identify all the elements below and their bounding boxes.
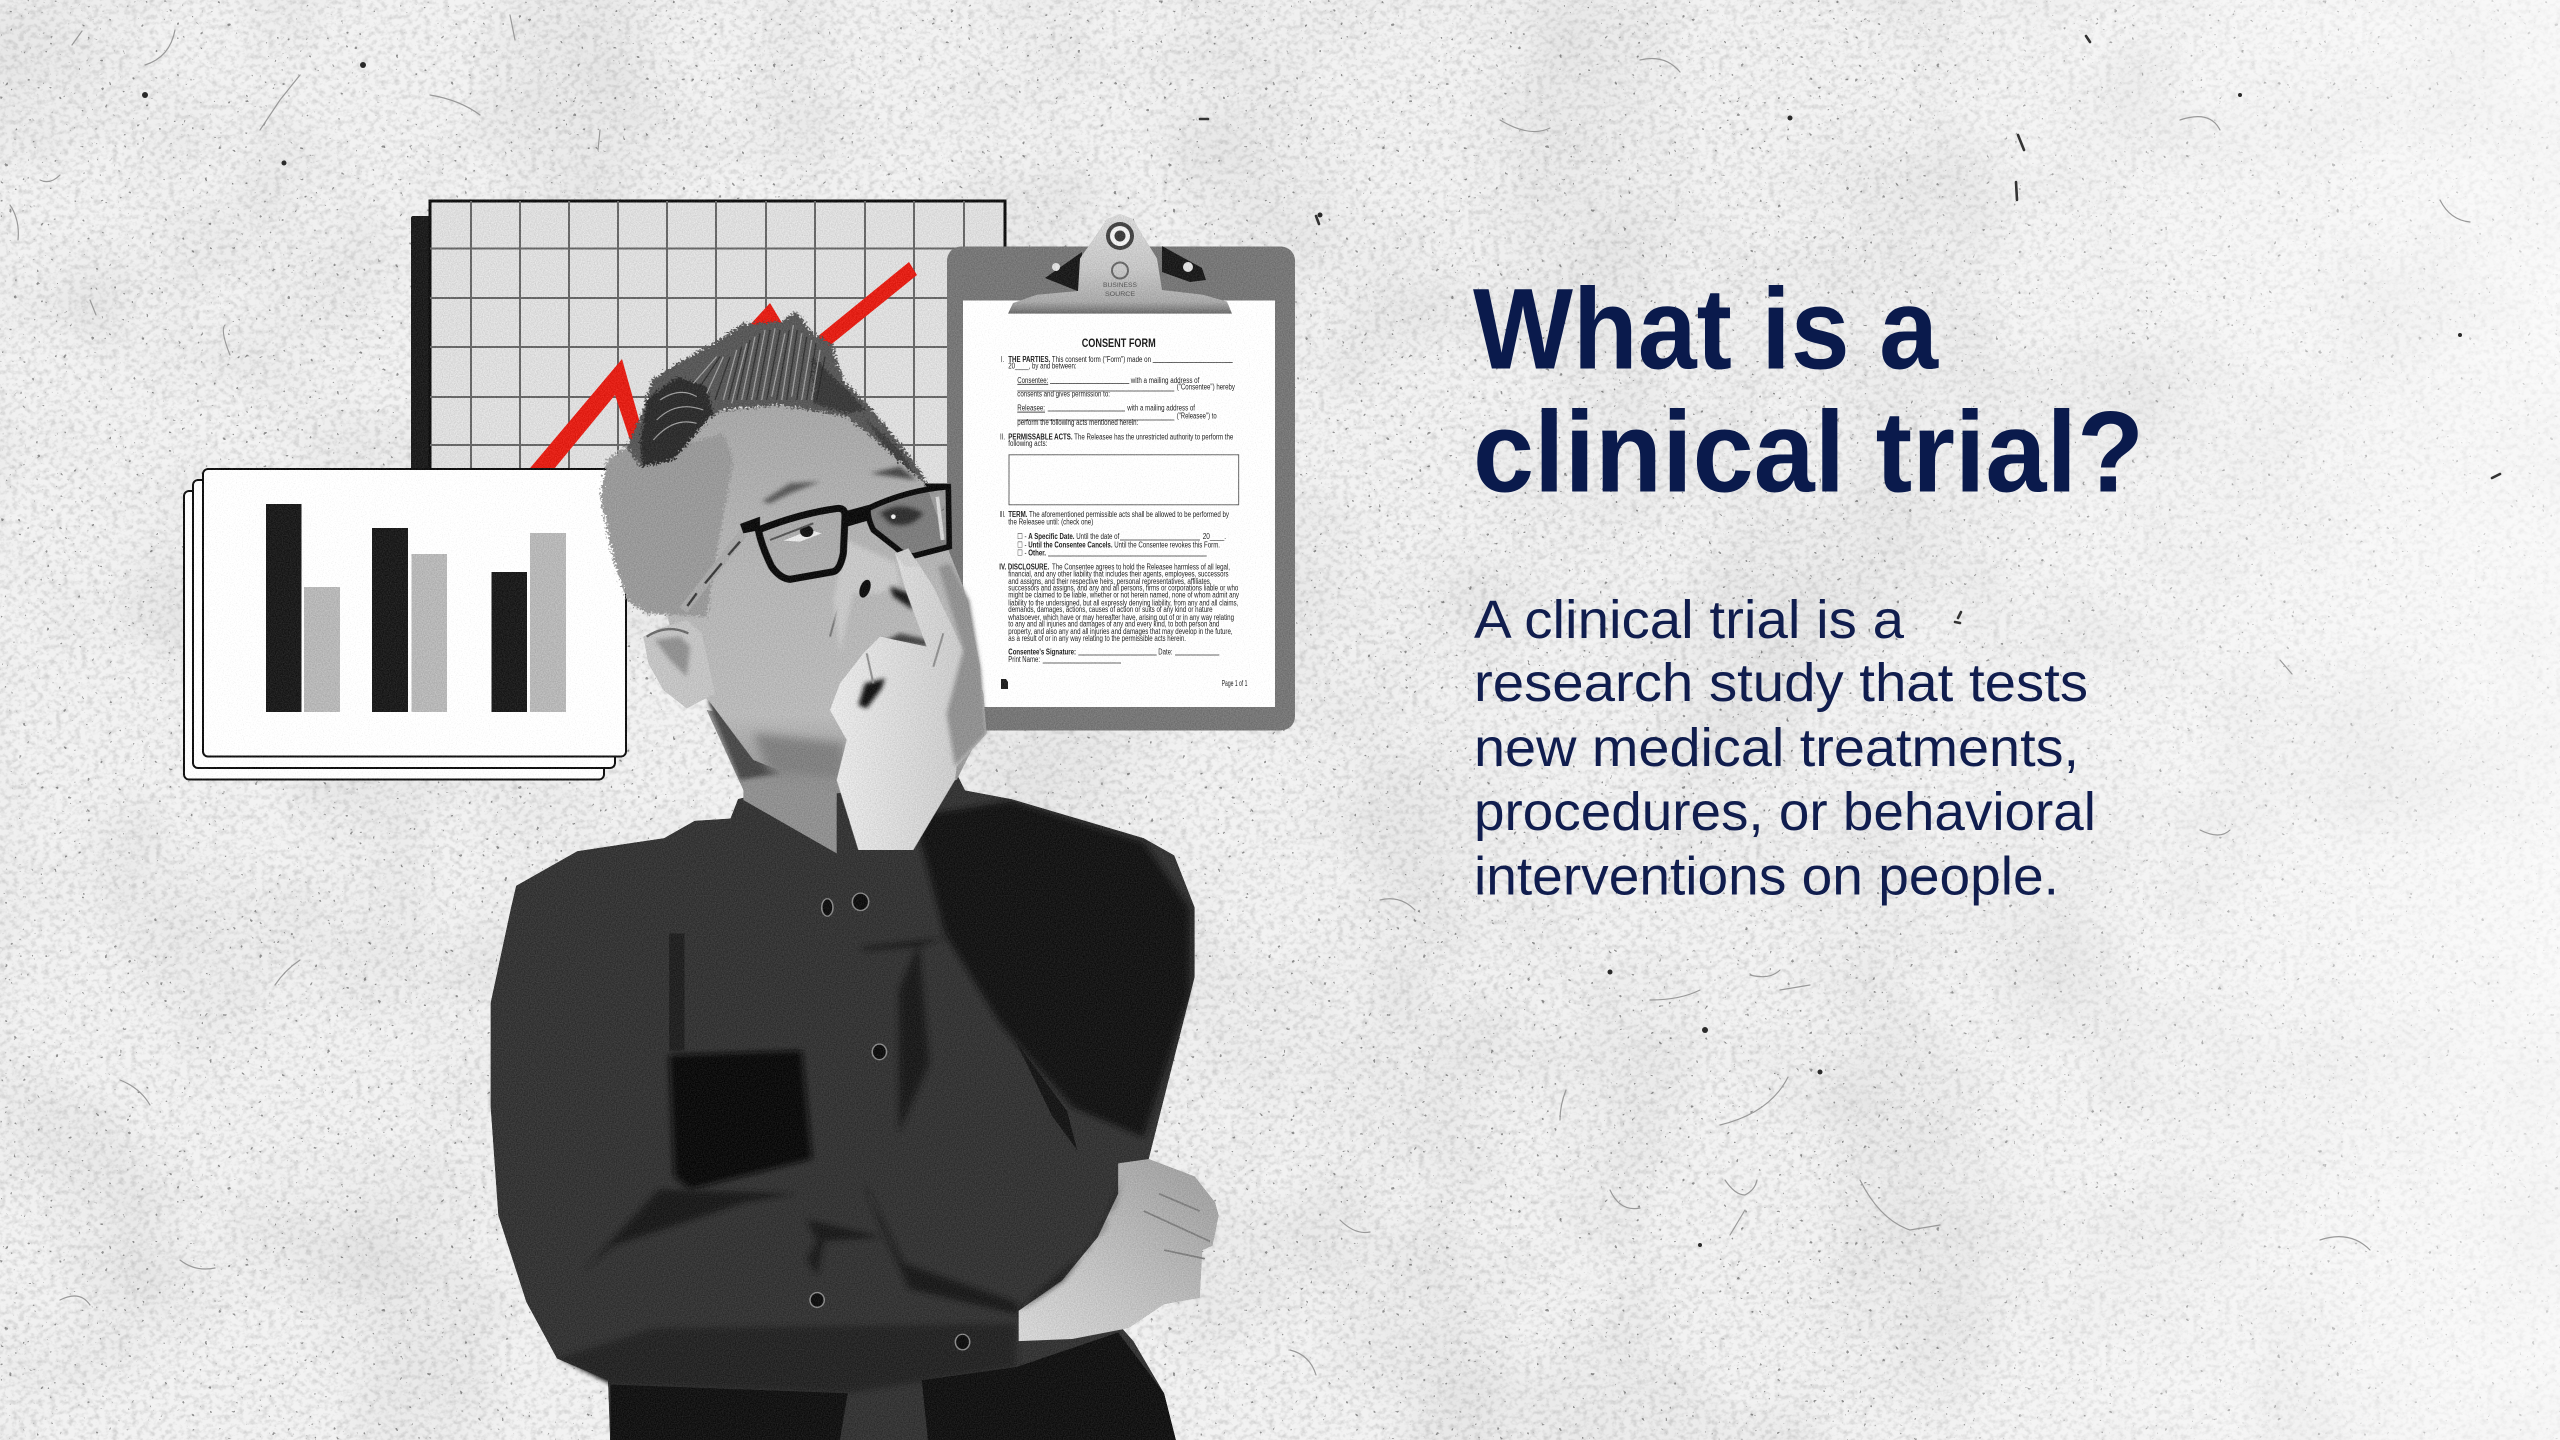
front card	[203, 469, 626, 756]
consent form text: perform the following acts mentioned herein:	[1017, 418, 1138, 427]
title: clinical trial?	[1473, 388, 2144, 516]
consent form text: Print Name:	[1008, 655, 1040, 664]
head group	[600, 312, 987, 853]
title	[1473, 266, 2144, 516]
top hair	[627, 312, 928, 487]
consent form text: successors and assigns, and any and all persons, firms or corporations liable or who	[1008, 584, 1239, 592]
consent form text: liability to the undersigned, but all expressly denying liability, from any and all claims,	[1008, 598, 1238, 607]
clipboard board	[947, 246, 1295, 730]
bar chart cards	[184, 469, 626, 780]
consent form text: 20____.	[1203, 532, 1226, 541]
consent form text: ("Releasee") to	[1177, 411, 1217, 420]
consent form text: ("Consentee") hereby	[1177, 383, 1235, 392]
consent form text: IV. DISCLOSURE.	[999, 562, 1049, 572]
fingertip on glasses	[895, 548, 920, 567]
shirt buttons	[810, 893, 970, 1350]
consent form text: as a result of or in any way relating to the permissible acts herein.	[1008, 634, 1186, 643]
consent form text: the Releasee until: (check one)	[1008, 518, 1094, 527]
consent form text: Page 1 of 1	[1222, 679, 1248, 688]
title: What is a	[1473, 266, 1939, 394]
forearm band	[557, 1324, 1016, 1393]
consent form text: II.	[1000, 432, 1005, 441]
person thinking	[491, 312, 1219, 1440]
consent form text: THE PARTIES. This consent form ("Form") made on	[1008, 355, 1151, 364]
consent form text: ☐ - Until the Consentee Cancels. Until the Consentee revokes this Form.	[1017, 540, 1220, 550]
body paragraph: procedures, or behavioral	[1474, 782, 2096, 842]
consent form text: ☐ - Other.	[1017, 548, 1046, 557]
shirt	[491, 760, 1219, 1440]
consent form text: Consentee's Signature:	[1008, 648, 1076, 656]
consent form text: Releasee:	[1017, 404, 1045, 413]
consent form text: CONSENT FORM	[1082, 338, 1156, 350]
consent form text: PERMISSABLE ACTS. The Releasee has the unrestricted authority to perform the	[1008, 432, 1234, 441]
body paragraph	[1474, 590, 2096, 906]
body paragraph: A clinical trial is a	[1474, 590, 1905, 650]
consent form text: Date:	[1158, 648, 1173, 656]
consent form text	[999, 338, 1248, 689]
consent form text: whatsoever, which have or may hereafter have, arising out of or in any way relating	[1008, 613, 1234, 622]
metal clip	[1008, 214, 1232, 314]
clipboard panel	[947, 214, 1295, 730]
metal clip: SOURCE	[1105, 292, 1135, 298]
red trend line	[520, 262, 917, 480]
consent form text: III.	[1000, 510, 1006, 519]
metal clip: BUSINESS	[1103, 283, 1137, 289]
shirt pocket shadow	[669, 1051, 812, 1189]
face shading	[753, 467, 928, 780]
bars	[266, 504, 566, 712]
consent form text: 20____, by and between:	[1008, 362, 1077, 371]
chart shadow edge	[411, 216, 431, 486]
raised hand	[830, 548, 987, 850]
consent form text: with a mailing address of	[1127, 403, 1196, 412]
body paragraph: interventions on people.	[1474, 846, 2059, 906]
consent form text: property, and also any and all injuries and damages that may develop in the future,	[1008, 627, 1233, 636]
consent form text: I.	[1001, 355, 1004, 364]
chart grid	[430, 201, 1005, 485]
sleeve folds	[582, 938, 1021, 1315]
glasses temple	[683, 533, 743, 610]
body paragraph: research study that tests	[1474, 653, 2088, 713]
lower hand	[1019, 1159, 1219, 1341]
middle card	[193, 480, 615, 768]
consent form text: to any and all injuries and damages of any and every kind, to both person and	[1008, 620, 1219, 629]
consent form text: with a mailing address of	[1130, 376, 1200, 385]
consent form text: following acts:	[1008, 439, 1047, 448]
consent form text: Consentee:	[1017, 376, 1048, 385]
line chart panel	[411, 201, 1005, 486]
consent form text: The Consentee agrees to hold the Releasee harmless of all legal,	[1052, 562, 1230, 572]
consent form text: and assigns, and their respective heirs, personal representatives, affiliates,	[1008, 577, 1212, 586]
consent form text: demands, damages, actions, causes of action or suits of any kind or nature	[1008, 605, 1213, 614]
consent form text: might be claimed to be liable, whether or not herein named, none of whom admit any	[1008, 591, 1239, 600]
glasses frame	[740, 487, 949, 579]
consent form paper	[963, 300, 1275, 707]
consent form text: ☐ - A Specific Date. Until the date of	[1017, 532, 1120, 541]
body paragraph: new medical treatments,	[1474, 718, 2079, 778]
face	[637, 405, 980, 793]
consent form text: TERM. The aforementioned permissible acts shall be allowed to be performed by	[1008, 510, 1229, 519]
shirt shadow right	[914, 801, 1190, 1137]
side hair	[600, 433, 733, 617]
neck	[707, 710, 837, 853]
ear	[643, 620, 715, 708]
consent form text: consents and gives permission to:	[1017, 390, 1110, 399]
consent form text: financial, and any other liability that includes their agents, employees, successors	[1008, 570, 1229, 579]
back card	[184, 491, 604, 780]
